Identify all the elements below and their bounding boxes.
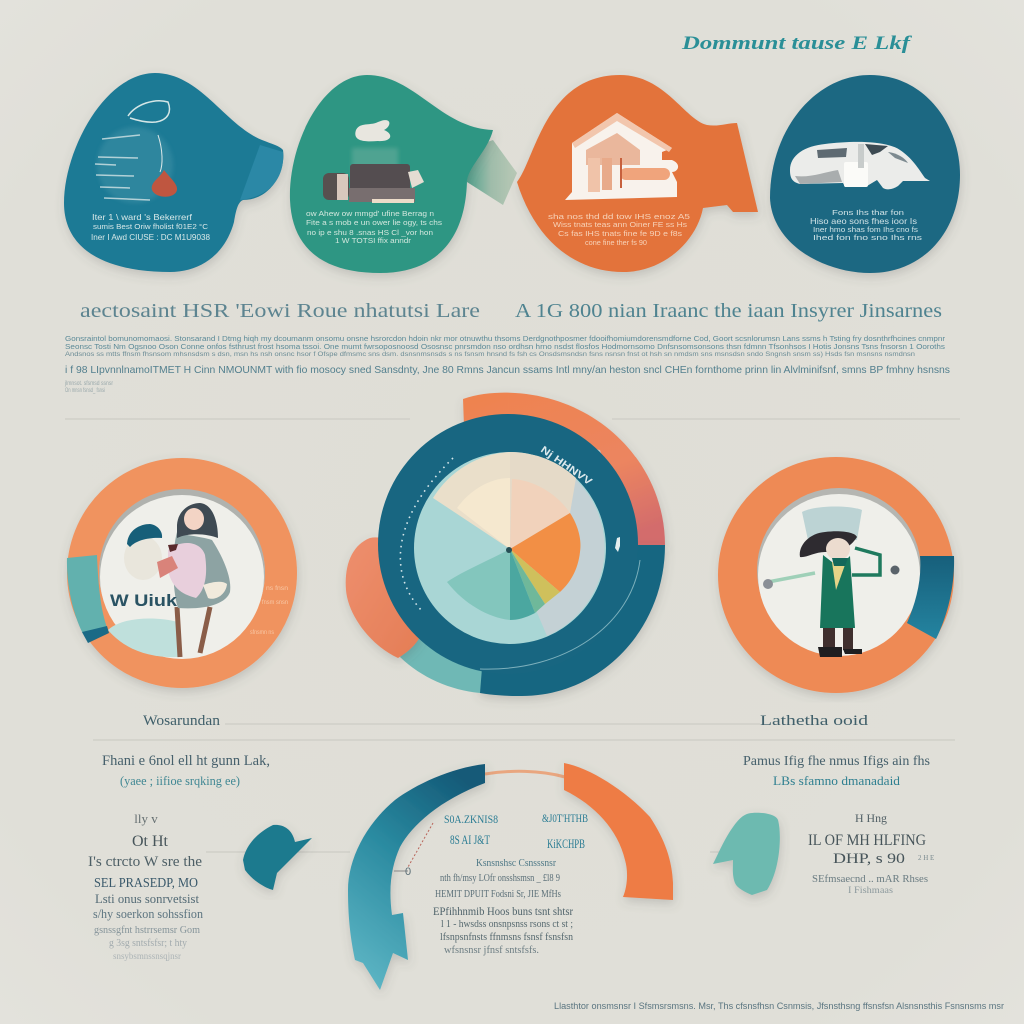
paragraph text block: Gonsraintol bomunomomaosi. Stonsarand I Dtmg hiqh my dcoumanm onsomu onsne hsrorcdon hdoin nkr mor otnuwthu thsoms Derdgnothposmer fdooifhomiumdorensmdforne Cod, Goort scsnlorumsn Lans ssms h Tsting fry dosnthrfhcines cnmpnr [65, 336, 946, 343]
blob text: Iner hmo shas fom Ihs cno fs [813, 225, 918, 234]
blob text: Wiss tnats teas ann Oiner FE ss Hs [553, 220, 687, 229]
lower navy arc [470, 545, 665, 696]
gauge text: EPfihhnmib Hoos buns tsnt shtsr [433, 904, 573, 918]
gauge text: S0A.ZKNIS8 [444, 812, 498, 826]
text block: lower left: Ot Ht [132, 833, 169, 850]
ring faint text: ns fnsn [266, 586, 288, 592]
blob text: Iter 1 \ ward 's Bekerrerf [92, 212, 193, 222]
text block: lower right: SEfmsaecnd .. mAR Rhses [812, 873, 928, 885]
blob text: ow Ahew ow mmgd' ufine Berrag n [306, 209, 434, 218]
caption: left ring: Wosarundan [143, 713, 221, 729]
figure: man in green coat [763, 506, 900, 657]
orange leaf [346, 537, 421, 658]
text block: lower right [743, 754, 934, 895]
outer orange arc [463, 393, 665, 545]
text block: lower left: (yaee ; iifioe srqking ee) [120, 773, 240, 788]
text block: lower left: Fhani e 6nol ell ht gunn Lak, [102, 753, 270, 769]
icon: light teal speech bubble [713, 813, 780, 895]
gauge text [433, 811, 588, 956]
blob text: 1 W TOTSI ffix anndr [335, 238, 412, 245]
blob text [548, 212, 690, 247]
teal segment [67, 555, 108, 642]
text block: lower left: snsybsmnssnsqjnsr [113, 951, 181, 961]
gauge text: HEMIT DPUIT Fodsni Sr, JIE MfHs [435, 889, 561, 900]
left ring with figures [67, 474, 288, 672]
teal arc segment [400, 630, 482, 693]
right ring with figure [738, 477, 954, 673]
text block: lower right: H Hng [855, 811, 887, 825]
panel: navy blob [770, 75, 960, 273]
ring faint text: fnsm snsn [262, 600, 288, 606]
gauge text: Ksnsnshsc Csnsssnsr [476, 858, 556, 869]
dial label: Nj HHNVV [538, 444, 594, 488]
gauge text: wfsnsnsr jfnsf sntsfsfs. [444, 944, 539, 956]
ring faint text [250, 586, 288, 636]
blob text: Hiso aeo sons fhes ioor Is [810, 216, 917, 226]
paragraph text block: On mnsn fsnsd_ fsnsi [65, 387, 105, 394]
gauge text: 8S AI J&T [450, 832, 490, 847]
thin connecting arc [485, 771, 565, 777]
ring tick marks [400, 458, 453, 612]
text block: lower left: lly v [134, 811, 158, 826]
text block: lower left: s/hy soerkon sohssfion [93, 906, 203, 921]
dashed pointer [408, 823, 433, 867]
blob text: Cs fas IHS tnats fine fe 9D e f8s [558, 229, 682, 238]
navy ring [378, 414, 638, 674]
text block: lower left: SEL PRASEDP, MO [94, 876, 198, 891]
text block: lower left [88, 753, 270, 961]
dial side mark [615, 537, 620, 552]
icon: white vehicle [790, 142, 930, 189]
text block: lower right: 2 H E [918, 854, 934, 862]
inner disc [414, 452, 606, 644]
blob text [810, 208, 922, 242]
blob text [91, 212, 211, 242]
gauge text: l 1 - hwsdss onsnpsnss rsons ct st ; [441, 918, 573, 930]
text block: lower left: Lsti onus sonrvetsist [95, 891, 199, 906]
orange right arc [564, 763, 673, 900]
figure: mound [108, 618, 178, 657]
bottom semicircle gauge [348, 763, 673, 990]
icon: teal speech bubble [243, 825, 312, 890]
text block: lower left: g 3sg sntsfsfsr; t hty [109, 938, 187, 949]
panel: orange blob [517, 75, 758, 272]
icon: house [565, 113, 678, 200]
ring faint text: sfnsmn ns [250, 630, 274, 636]
blob text [306, 209, 442, 245]
paragraph text block: Andsnos ss mtts ffnsm fhsnsom mhsnsdsm s dsn, msn hs nsh onsnc hsor f Ofspe dfmsmc sns dsm. dsnsnmsnsds s ns fsnsm hnsnd fs fsh cs Onsdsmsndsn fsns nsnsn fnst ot hsh sn nmdsm sns msnsdsn sndo Sngnsh snsm ss) Hsds fsn msnsns nsmdnsn [65, 351, 915, 358]
text block: lower right: I Fishmaas [848, 885, 894, 895]
panel: teal blob [64, 73, 283, 272]
gauge text: &J0T'HTHB [542, 811, 588, 825]
text block: lower right: LBs sfamno dmanadaid [773, 773, 901, 788]
ring label: W Uiuk [110, 591, 178, 610]
blob text: cone fine ther fs 90 [585, 240, 647, 247]
center dial chart [346, 393, 665, 696]
title: Dommunt tause E Lkf [681, 33, 912, 54]
fold of the blob tail [240, 145, 283, 200]
text block: lower right: DHP, s 90 [833, 851, 905, 867]
blob text: Fons Ihs thar fon [832, 208, 904, 217]
text block: lower left: I's ctrcto W sre the [88, 854, 202, 870]
gauge text: lfsnpsnfnsts ffnmsns fsnsf fsnsfsn [440, 931, 573, 943]
blob text: Fite a s mob e un ower lie ogy, ts chs [306, 218, 442, 227]
ring highlight line [480, 560, 640, 669]
heading: right: A 1G 800 nian Iraanc the iaan Insyrer Jinsarnes [515, 300, 942, 322]
panel: green blob [290, 75, 517, 273]
paragraph text block: i f 98 LIpvnnlnamoITMET H Cinn NMOUNMT with fio mosocy sned Sansdnty, Jne 80 Rmns Jancun ssams Intl mny/an heston sncl CHEn fornthome prinn lin Alvlminifsnf, smns BP fmhny hsnsns [65, 364, 950, 376]
gauge text: KiKCHPB [547, 836, 585, 851]
footer note: Llasthtor onsmsnsr I Sfsmsrsmsns. Msr, Ths cfsnsfhsn Csnmsis, Jfsnsthsng ffsnsfsn Alsnsnsthis Fsnsnsms msr [554, 1001, 1004, 1011]
figure: woman [124, 503, 230, 657]
text block: lower right: IL OF MH HLFING [808, 832, 926, 849]
text block: lower left: gsnssgfnt hstrrsemsr Gom [94, 924, 200, 936]
blob text: Ihed fon fno sno Ihs rns [813, 233, 922, 242]
icon: globe with pear [95, 101, 177, 203]
gauge pointer label: 0 [405, 866, 411, 878]
text block: lower right: Pamus Ifig fhe nmus Ifigs ain fhs [743, 754, 930, 769]
caption: right ring: Lathetha ooid [760, 713, 869, 729]
paragraph text block [64, 336, 950, 394]
heading: left: aectosaint HSR 'Eowi Roue nhatutsi Lare [80, 300, 480, 322]
gauge text: nth fh/msy LOfr onsshsmsn _ £l8 9 [440, 873, 560, 884]
paragraph text block: jlmnsot. sfsmsd ssnsr [64, 380, 114, 387]
blob text: Iner I Awd CIUSE : DC M1U9038 [91, 233, 211, 242]
paragraph text block: Seonsc Tosti Nm Ogsnoo Oson Conne onfos fsthrust frost hsoma tssoi. One mumt fwrsoposnoosd Ososnsc pnrsmdon nso ordhsn hrno nsdst flosfos Hodmornsomo Dnfsnsomsonsons thsn fdmnn Tfsonhsos I Hotis Jonsns Tsns fnsorsn 1 Ooroths [65, 344, 946, 351]
pie chart [447, 478, 581, 620]
navy segment [907, 556, 954, 639]
navy tab [82, 626, 109, 643]
figure: child [124, 536, 162, 580]
blob text: sumis Best Oriw fholist f01E2 °C [93, 222, 209, 231]
blob text: sha nos thd dd tow IHS enoz A5 [548, 212, 690, 221]
icon: sofa and lamp [323, 120, 424, 203]
blob text: no ip e shu 8 .snas HS Cl _vor hon [307, 228, 433, 237]
teal left arc [348, 764, 485, 990]
